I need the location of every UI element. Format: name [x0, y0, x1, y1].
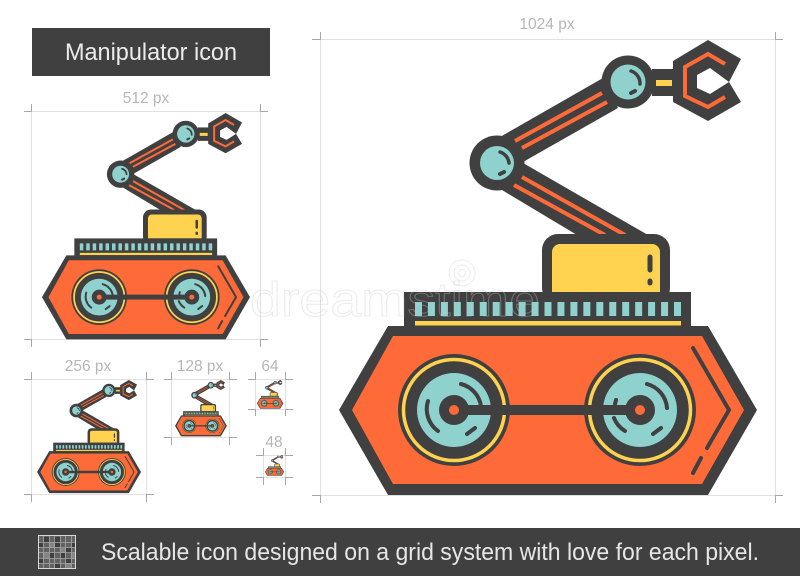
icon: manipulator 1024 px — [339, 40, 757, 495]
icon: manipulator 512 px — [42, 113, 250, 339]
label: 48: 48 — [265, 434, 283, 451]
footer caption: Scalable icon designed on a grid system with love for each pixel. — [101, 539, 759, 566]
512 px size frame — [24, 104, 268, 347]
title banner: Manipulator icon — [65, 39, 237, 66]
title banner — [32, 28, 270, 76]
icon: manipulator 128 px — [175, 380, 227, 436]
icon: pixel grid — [38, 535, 76, 569]
256 px size frame — [24, 372, 154, 502]
icon: manipulator 48 px — [265, 455, 284, 476]
128 px size frame — [164, 372, 237, 445]
64 px size frame — [248, 372, 293, 416]
48 px size frame — [256, 448, 293, 485]
watermark — [250, 260, 540, 327]
1024 px size frame — [312, 32, 783, 503]
label: 64: 64 — [261, 358, 279, 375]
icon: manipulator 64 px — [257, 380, 283, 409]
footer bar — [0, 528, 800, 576]
icon: manipulator 256 px — [37, 380, 141, 493]
label: 256 px: 256 px — [65, 358, 112, 375]
watermark: dreamstime — [250, 274, 540, 327]
label: 1024 px: 1024 px — [519, 16, 575, 33]
label: 128 px: 128 px — [177, 358, 224, 375]
label: 512 px: 512 px — [123, 90, 170, 107]
